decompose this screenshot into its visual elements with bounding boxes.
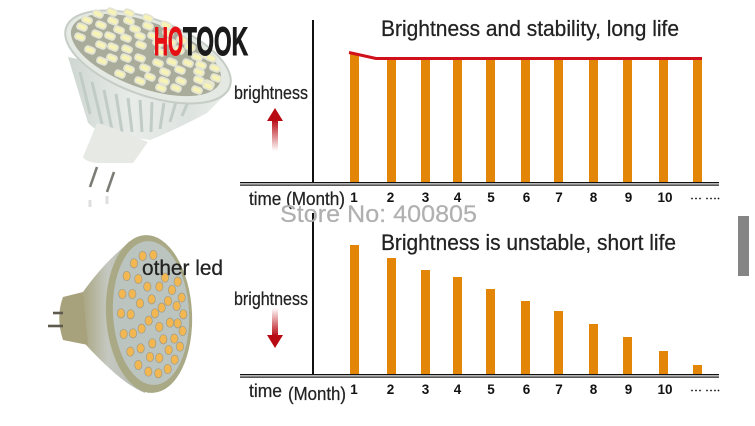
x-axis numbers: 6 bbox=[523, 382, 531, 397]
gray side tab bbox=[738, 216, 749, 276]
bars bbox=[350, 245, 702, 374]
icon: other LED bulb bbox=[48, 233, 196, 395]
bulb glass body bbox=[68, 57, 230, 140]
logo: HOTOOK: TOOK bbox=[183, 20, 248, 64]
x-axis numbers: 9 bbox=[625, 190, 632, 205]
bulb body bbox=[83, 238, 145, 393]
ellipsis marker bbox=[691, 198, 719, 199]
bulb base bbox=[83, 123, 148, 163]
x-axis numbers bbox=[350, 190, 673, 205]
bulb pins bbox=[48, 313, 63, 326]
logo: HOTOOK bbox=[154, 20, 248, 64]
x-axis numbers: 7 bbox=[555, 190, 563, 205]
x-axis numbers: 2 bbox=[387, 382, 394, 397]
x-axis numbers: 5 bbox=[487, 190, 495, 205]
label: time month top: time (Month) bbox=[249, 189, 345, 209]
watermark: store number: Store No: 400805 bbox=[280, 201, 477, 228]
x-axis numbers: 3 bbox=[422, 382, 430, 397]
heading: long life: Brightness and stability, long life bbox=[381, 16, 679, 41]
amber LED chips bbox=[117, 250, 187, 378]
x-axis numbers: 1 bbox=[350, 190, 358, 205]
chart axes bbox=[240, 20, 719, 186]
ellipsis marker bbox=[691, 390, 719, 391]
x-axis numbers: 5 bbox=[487, 382, 495, 397]
label: other led: other led bbox=[142, 257, 223, 280]
x-axis numbers: 2 bbox=[387, 190, 394, 205]
arrow: up bbox=[267, 108, 283, 151]
bulb pins bbox=[90, 167, 114, 192]
x-axis numbers: 10 bbox=[657, 190, 673, 205]
arrow: down bbox=[267, 308, 283, 348]
x-axis numbers: 4 bbox=[454, 382, 462, 397]
heading: short life: Brightness is unstable, short life bbox=[381, 230, 676, 255]
label: time: time bbox=[249, 381, 282, 401]
bars bbox=[350, 53, 702, 182]
logo: HOTOOK: HO bbox=[154, 20, 183, 64]
x-axis numbers: 1 bbox=[350, 382, 358, 397]
x-axis numbers: 8 bbox=[590, 190, 598, 205]
red trend line bbox=[349, 52, 702, 58]
x-axis numbers: 9 bbox=[625, 382, 632, 397]
x-axis numbers: 10 bbox=[657, 382, 673, 397]
x-axis numbers: 8 bbox=[590, 382, 598, 397]
bulb rim bbox=[102, 233, 196, 395]
chart: unstable brightness bbox=[240, 213, 719, 397]
x-axis numbers: 4 bbox=[454, 190, 462, 205]
x-axis numbers bbox=[350, 382, 673, 397]
white LED chips bbox=[74, 7, 222, 95]
x-axis numbers: 6 bbox=[523, 190, 531, 205]
chart: stable brightness bbox=[240, 20, 719, 205]
label: brightness down: brightness bbox=[234, 289, 308, 309]
x-axis numbers: 3 bbox=[422, 190, 430, 205]
chart axes bbox=[240, 213, 719, 378]
bulb base bbox=[59, 292, 88, 345]
label: brightness up: brightness bbox=[234, 83, 308, 103]
x-axis numbers: 7 bbox=[555, 382, 563, 397]
bulb glass rim bbox=[53, 0, 243, 122]
icon: white LED bulb bbox=[53, 0, 243, 207]
label: month: (Month) bbox=[288, 384, 346, 404]
